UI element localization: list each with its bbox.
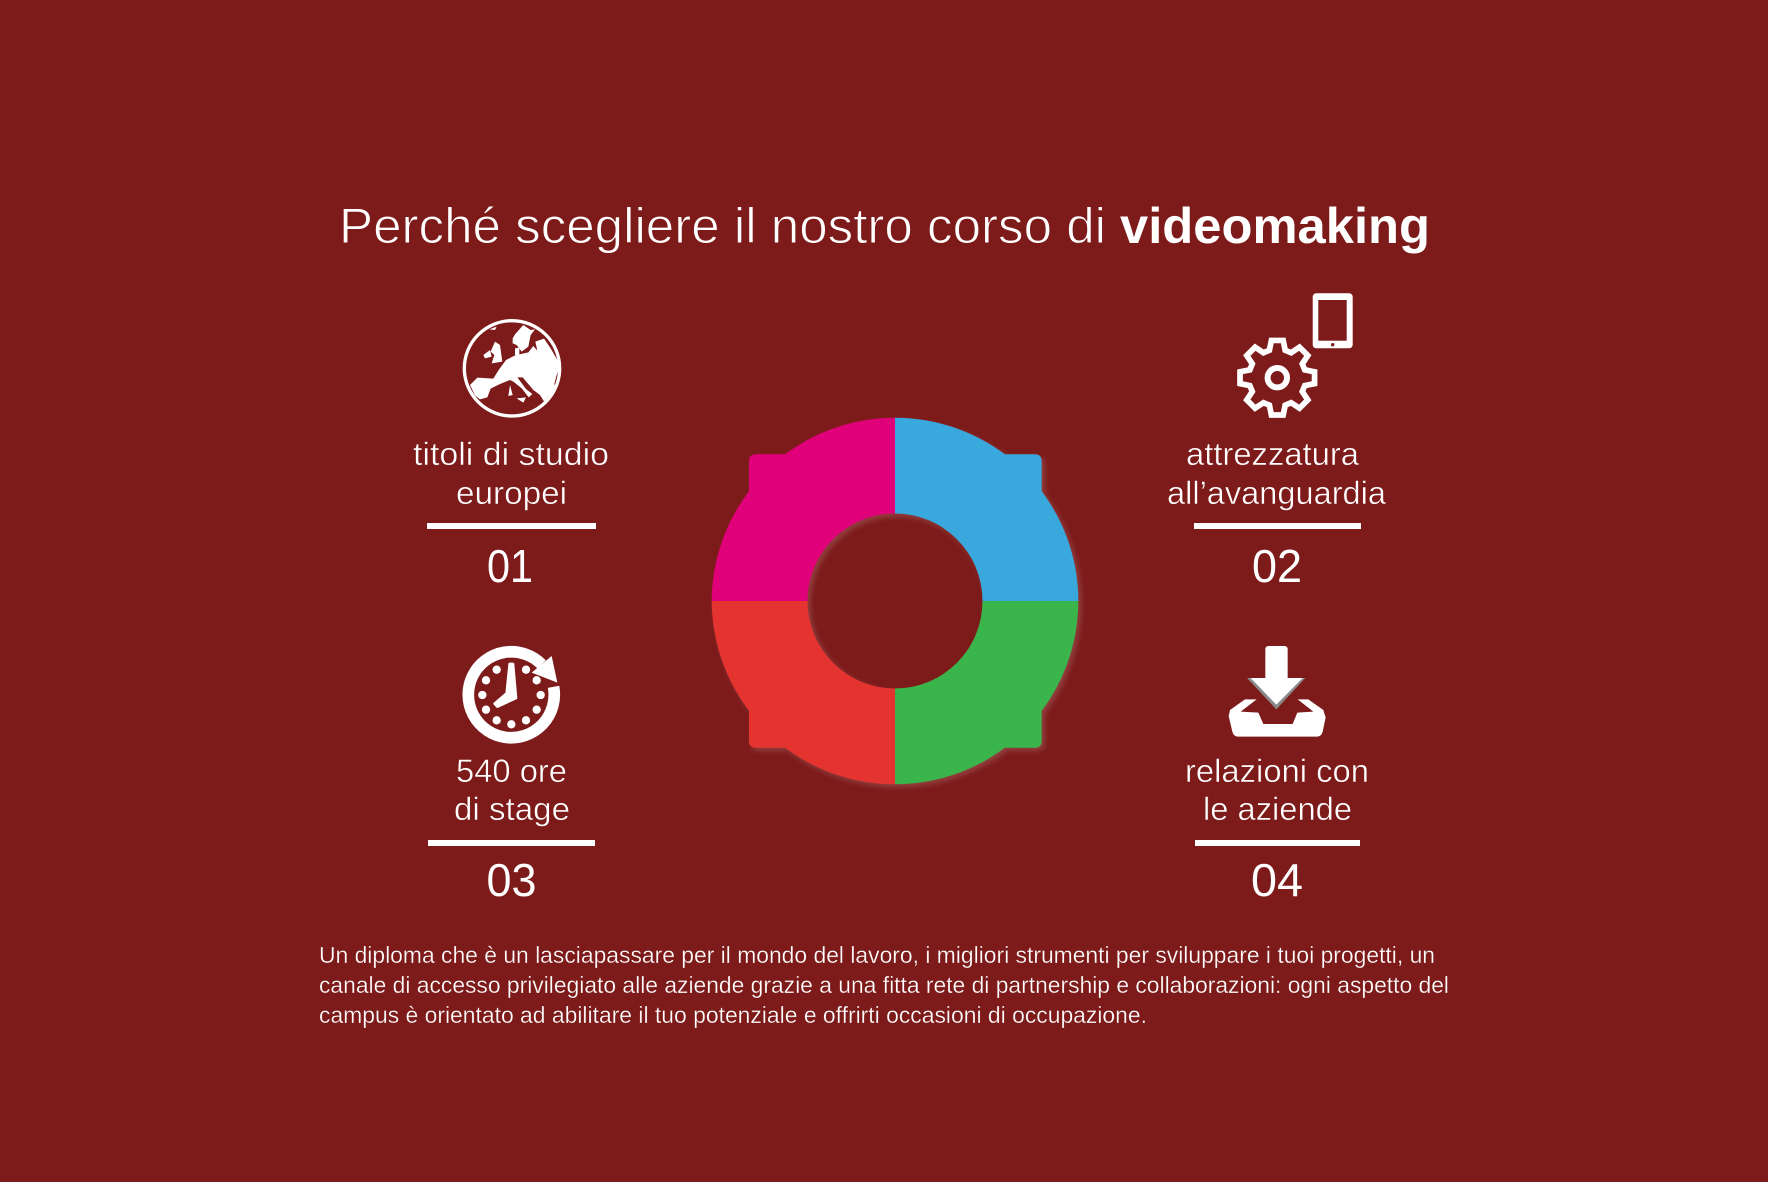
panel: item 03 540 ore di stage: [428, 652, 595, 906]
label: europei: [456, 475, 567, 511]
panel: item 02 attrezzatura all'avanguardia: [1167, 293, 1387, 592]
description paragraph: canale di accesso privilegiato alle aziende grazie a una fitta rete di partnership e collaborazioni: ogni aspetto del: [319, 972, 1449, 998]
label: all’avanguardia: [1167, 475, 1387, 511]
ring segment: red: [712, 601, 895, 784]
number 02: 02: [1252, 540, 1302, 592]
panel: item 01 titoli di studio europei: [413, 321, 609, 592]
label: 540 ore: [456, 753, 567, 789]
ring segment: magenta: [712, 418, 895, 601]
panel: item 04 relazioni con le aziende: [1185, 646, 1369, 906]
description paragraph: Un diploma che è un lasciapassare per il mondo del lavoro, i migliori strumenti per sviluppare i tuoi progetti, un: [319, 942, 1435, 968]
label: [1167, 436, 1387, 511]
title: videomaking: [1120, 198, 1430, 254]
label: di stage: [454, 791, 570, 827]
description paragraph: campus è orientato ad abilitare il tuo potenziale e offrirti occasioni di occupazione.: [319, 1002, 1147, 1028]
icon: download to tray: [1229, 646, 1326, 737]
description paragraph: [319, 942, 1449, 1028]
icon: globe with Europe: [464, 321, 560, 416]
label: [413, 436, 609, 511]
ring segment: blue: [895, 418, 1078, 601]
ring segment: green: [895, 601, 1078, 784]
label: titoli di studio: [413, 436, 609, 472]
label: attrezzatura: [1186, 436, 1360, 472]
number 01: 01: [487, 540, 533, 592]
label: le aziende: [1203, 791, 1352, 827]
number 04: 04: [1251, 854, 1303, 906]
icon: clock with arrow: [468, 652, 557, 738]
label: [454, 753, 570, 827]
central ring diagram: [712, 418, 1078, 784]
title: [339, 198, 1430, 254]
number 03: 03: [486, 854, 536, 906]
icon: gear and tablet: [1240, 293, 1353, 415]
title: Perché scegliere il nostro corso di: [339, 198, 1106, 254]
label: [1185, 753, 1369, 827]
label: relazioni con: [1185, 753, 1369, 789]
